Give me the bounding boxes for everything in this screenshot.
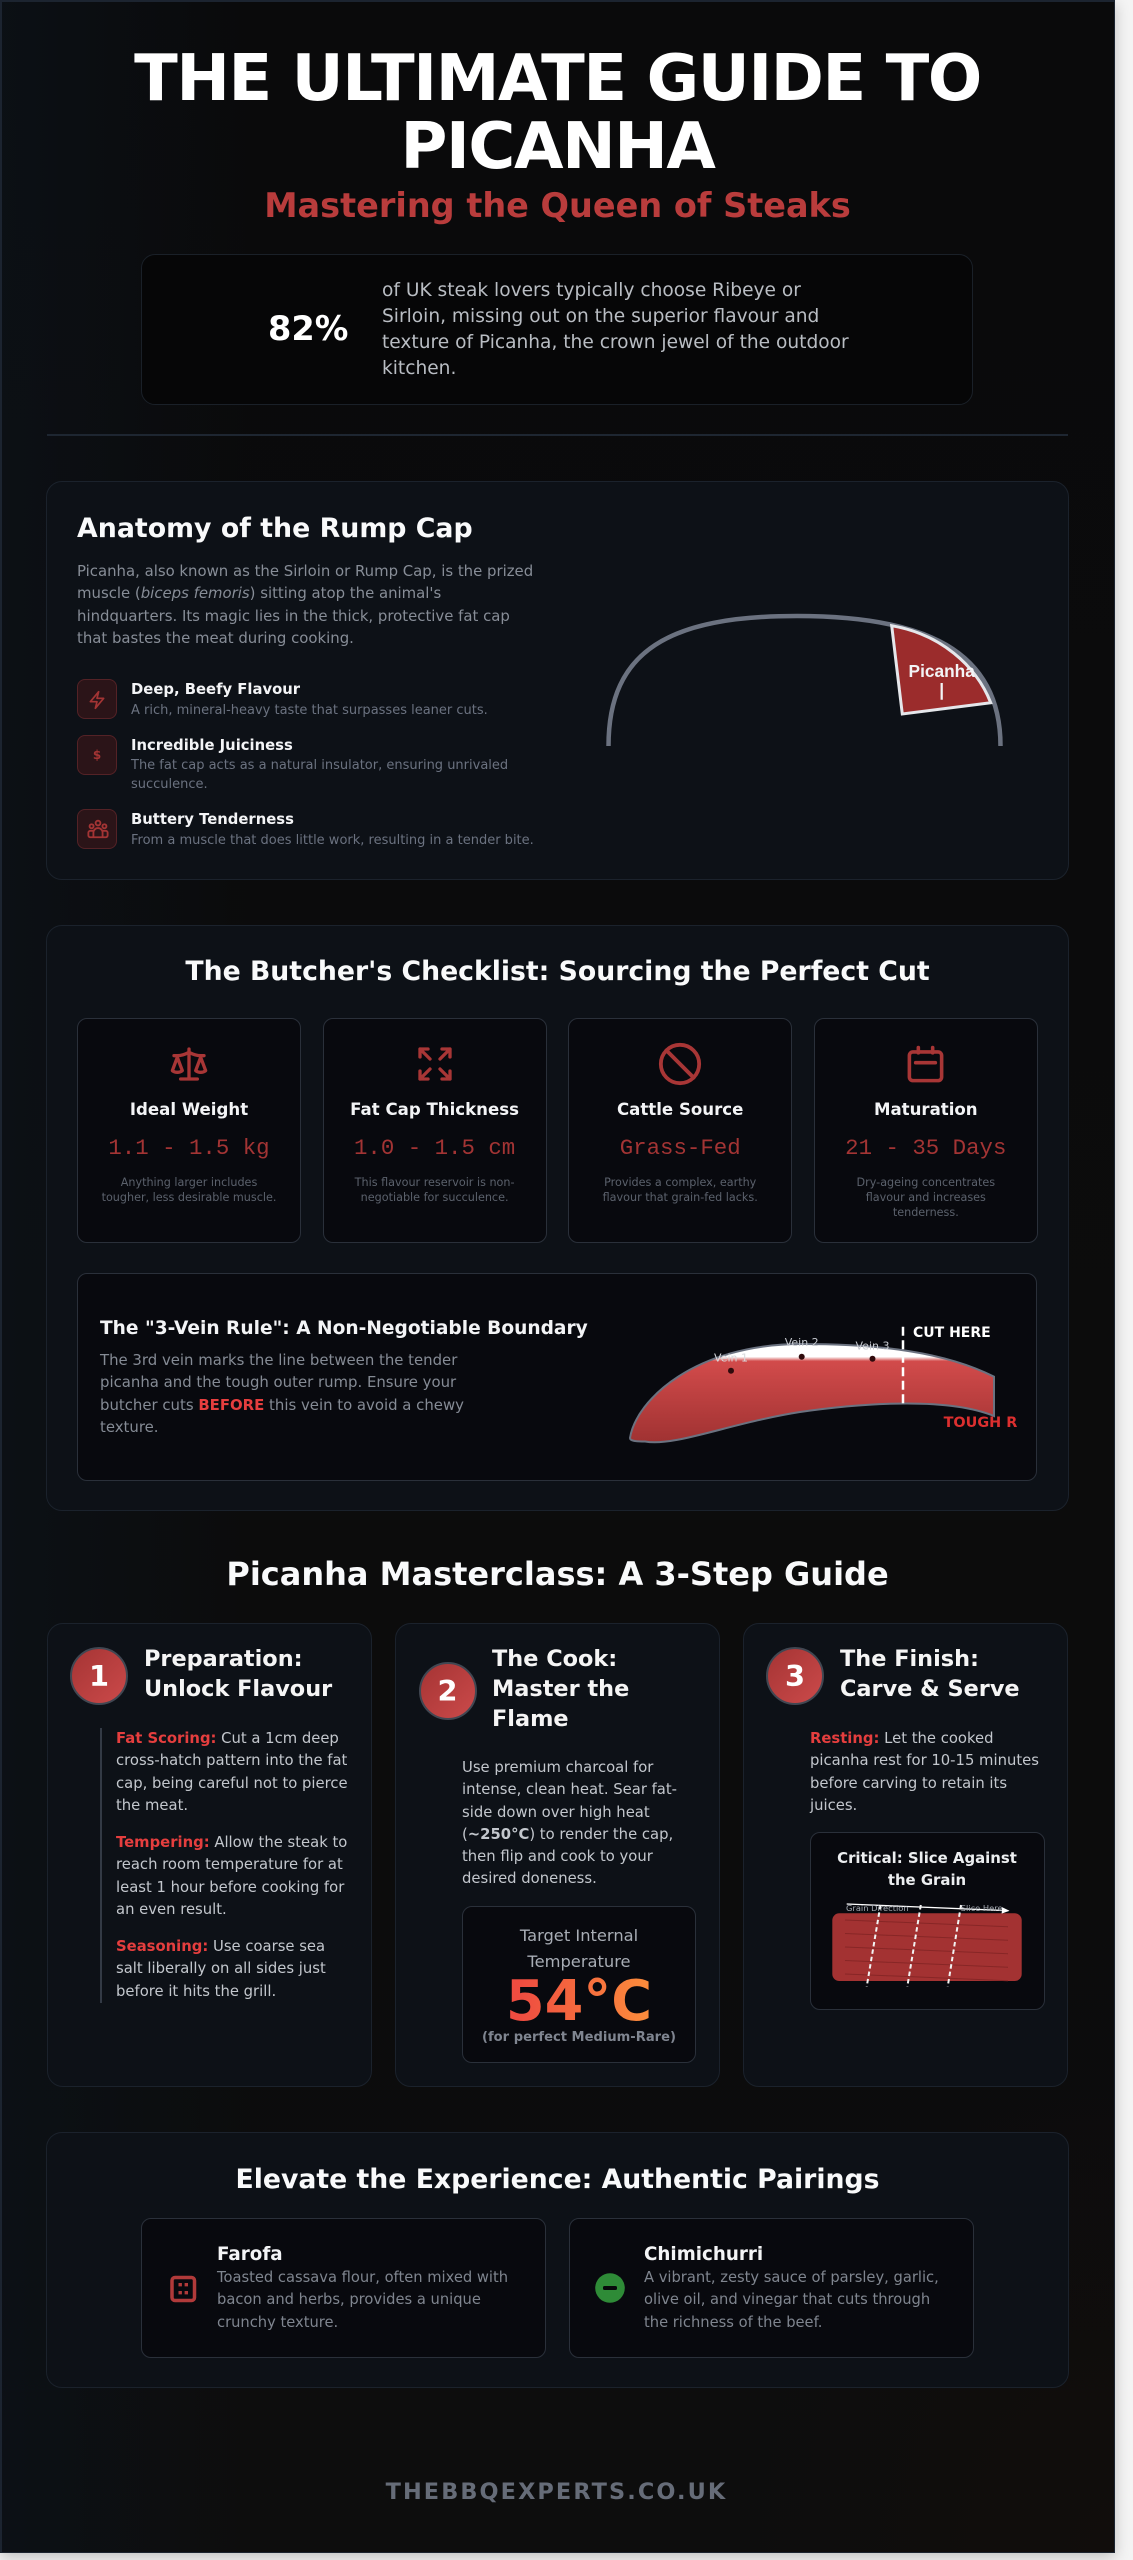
card note: tenderness. — [893, 1206, 959, 1219]
step 3 instructions — [810, 1730, 1039, 1814]
card: chimichurri — [569, 2218, 974, 2358]
panel: step 3 — [742, 1623, 1068, 2087]
tough rump label: TOUGH R — [944, 1415, 1017, 1431]
cut line — [902, 1327, 904, 1407]
feature: flavour title: Deep, Beefy Flavour — [131, 681, 300, 698]
card: ideal weight — [77, 1018, 301, 1243]
step 1 instructions — [100, 1728, 360, 2003]
icon: farofa — [170, 2276, 196, 2302]
card note: flavour and increases — [866, 1191, 986, 1204]
feature: juiciness description: The fat cap acts as a natural insulator, ensuring unrivaled — [131, 758, 508, 773]
seasoning — [116, 1938, 326, 2000]
statistic description: Sirloin, missing out on the superior flavour and — [382, 306, 819, 327]
tempering — [116, 1834, 347, 1918]
step 2 title: Flame — [492, 1706, 569, 1732]
feature: tenderness title: Buttery Tenderness — [131, 811, 294, 828]
title: THE ULTIMATE GUIDE TO — [134, 42, 981, 116]
heading: pairings: Elevate the Experience: Authentic Pairings — [236, 2164, 879, 2195]
panel: butcher's checklist — [46, 925, 1069, 1511]
icon: scales — [170, 1047, 208, 1081]
diagram: rump cap anatomy — [606, 614, 1003, 746]
temperature value: 54°C — [506, 1969, 652, 2034]
anatomy description: Picanha, also known as the Sirloin or Rump Cap, is the prized — [77, 562, 533, 580]
subtitle: Mastering the Queen of Steaks — [264, 186, 851, 225]
tempering: Tempering: Allow the steak to — [116, 1834, 347, 1851]
callout title — [837, 1849, 1017, 1889]
vein 1: Vein 1 — [714, 1352, 748, 1364]
cut label: CUT HERE — [913, 1325, 991, 1341]
temperature label: Temperature — [527, 1952, 631, 1971]
farofa title: Farofa — [217, 2244, 283, 2265]
icon: calendar — [908, 1046, 944, 1082]
panel: step 1 — [46, 1623, 372, 2087]
chimichurri description: the richness of the beef. — [644, 2314, 822, 2331]
temperature value — [463, 1967, 695, 2037]
vein 3: Vein 3 — [856, 1340, 889, 1352]
step 3 instructions: picanha rest for 10-15 minutes — [810, 1752, 1039, 1769]
grain arrow — [847, 1904, 1008, 1911]
heading: 3-vein rule: The "3-Vein Rule": A Non-Negotiable Boundary — [100, 1318, 588, 1339]
title — [134, 42, 981, 184]
card title: Maturation — [874, 1100, 978, 1119]
step 2 instructions: (~250°C) to render the cap, — [462, 1826, 673, 1843]
card note — [602, 1176, 758, 1204]
card title: Cattle Source — [617, 1100, 743, 1119]
slice label: Slice Here — [961, 1903, 1003, 1913]
farofa description: Toasted cassava flour, often mixed with — [217, 2269, 508, 2286]
card note: Anything larger includes — [121, 1176, 257, 1189]
step 3 instructions: before carving to retain its — [810, 1775, 1007, 1792]
icon: tenderness — [77, 808, 117, 848]
chimichurri title: Chimichurri — [644, 2244, 763, 2265]
step 2 title: Master the — [492, 1676, 629, 1702]
vein 3 — [856, 1340, 889, 1362]
cow rump outline — [608, 616, 1000, 746]
statistic description: of UK steak lovers typically choose Ribeye or — [382, 280, 801, 301]
card note: Dry-ageing concentrates — [857, 1176, 995, 1189]
vein 2 — [785, 1336, 819, 1360]
step 3 number: 3 — [785, 1659, 805, 1693]
fat scoring: the meat. — [116, 1797, 188, 1814]
anatomy description: hindquarters. Its magic lies in the thick, protective fat cap — [77, 607, 510, 625]
3-vein description: The 3rd vein marks the line between the tender — [100, 1351, 457, 1369]
card value: 1.1 - 1.5 kg — [108, 1135, 270, 1161]
diagram: veins on the picanha — [629, 1325, 1017, 1444]
statistic value: 82% — [268, 309, 348, 348]
tempering: an even result. — [116, 1901, 227, 1918]
step 2 instructions: intense, clean heat. Sear fat- — [462, 1781, 677, 1798]
icon: expand arrows — [418, 1047, 452, 1081]
callout: slice against the grain — [810, 1832, 1044, 2010]
panel: pairings — [46, 2132, 1069, 2388]
grain label: Grain Direction — [846, 1903, 909, 1913]
callout title: Critical: Slice Against — [837, 1849, 1017, 1867]
vein 2: Vein 2 — [785, 1336, 819, 1349]
farofa description: crunchy texture. — [217, 2314, 338, 2331]
card note: flavour that grain-fed lacks. — [603, 1191, 758, 1204]
title: PICANHA — [400, 110, 715, 184]
feature: juiciness description — [130, 758, 508, 792]
step 3 number — [766, 1647, 824, 1705]
feature: juiciness title: Incredible Juiciness — [131, 737, 293, 754]
card: maturation — [814, 1018, 1038, 1243]
tempering: least 1 hour before cooking for — [116, 1879, 344, 1896]
card note: Provides a complex, earthy — [604, 1176, 756, 1189]
step 2 number: 2 — [437, 1674, 458, 1708]
step 3 instructions: Resting: Let the cooked — [810, 1730, 994, 1747]
seasoning: salt liberally on all sides just — [116, 1960, 326, 1977]
anatomy description: muscle (biceps femoris) sitting atop the animal's — [77, 584, 441, 602]
card note: This flavour reservoir is non- — [355, 1176, 515, 1189]
card: fat cap thickness — [323, 1018, 547, 1243]
card title: Ideal Weight — [130, 1100, 248, 1119]
step 2 instructions — [462, 1759, 677, 1887]
step 2 title — [492, 1646, 629, 1732]
slice lines — [867, 1905, 961, 1987]
card: farofa — [141, 2218, 546, 2358]
farofa description — [216, 2269, 508, 2331]
step 1 title — [144, 1646, 332, 1702]
heading: anatomy: Anatomy of the Rump Cap — [77, 513, 473, 544]
step 2 instructions: desired doneness. — [462, 1870, 597, 1887]
icon: chimichurri — [595, 2273, 625, 2303]
icon: ban — [658, 1042, 702, 1086]
step 2 instructions: Use premium charcoal for — [462, 1759, 653, 1776]
temperature note: (for perfect Medium-Rare) — [482, 2030, 676, 2045]
feature: flavour description: A rich, mineral-heavy taste that surpasses leaner cuts. — [131, 703, 488, 718]
icon: flavour bolt — [77, 679, 117, 719]
feature: juiciness description: succulence. — [131, 777, 208, 792]
panel: anatomy of the rump cap — [46, 481, 1069, 880]
fat scoring: cross-hatch pattern into the fat — [116, 1752, 347, 1769]
anatomy description — [77, 562, 533, 647]
statistic description: kitchen. — [382, 358, 456, 379]
statistic description: texture of Picanha, the crown jewel of the outdoor — [382, 332, 849, 353]
wedge marker: | — [939, 680, 944, 700]
3-vein description: texture. — [100, 1418, 159, 1436]
anatomy description: that bastes the meat during cooking. — [77, 629, 354, 647]
step 1 number: 1 — [89, 1659, 109, 1693]
statistic description — [382, 280, 849, 379]
temperature label — [520, 1926, 638, 1971]
vein 1 — [714, 1352, 748, 1374]
step 2 instructions: then flip and cook to your — [462, 1848, 653, 1865]
feature: tenderness description: From a muscle that does little work, resulting in a tender bite. — [131, 833, 534, 848]
callout: target temperature — [462, 1906, 696, 2063]
card note: negotiable for succulence. — [361, 1191, 509, 1204]
callout title: the Grain — [888, 1871, 966, 1889]
seasoning: before it hits the grill. — [116, 1983, 276, 2000]
steak shape — [630, 1344, 994, 1442]
fat scoring: cap, being careful not to pierce — [116, 1775, 348, 1792]
fat scoring — [116, 1730, 348, 1814]
fat scoring: Fat Scoring: Cut a 1cm deep — [116, 1730, 339, 1747]
temperature label: Target Internal — [520, 1926, 638, 1945]
card note — [102, 1176, 276, 1204]
chimichurri description: A vibrant, zesty sauce of parsley, garlic, — [644, 2269, 939, 2286]
3-vein description: picanha and the tough outer rump. Ensure your — [100, 1373, 456, 1391]
step 3 title — [840, 1646, 1020, 1702]
card value: 21 - 35 Days — [845, 1135, 1006, 1161]
heading: masterclass: Picanha Masterclass: A 3-Step Guide — [226, 1555, 889, 1593]
farofa description: bacon and herbs, provides a unique — [217, 2291, 481, 2308]
step 1 title: Unlock Flavour — [144, 1676, 332, 1702]
step 3 instructions: juices. — [810, 1797, 857, 1814]
card value: 1.0 - 1.5 cm — [354, 1135, 515, 1161]
chimichurri description: olive oil, and vinegar that cuts through — [644, 2291, 930, 2308]
footer: THEBBQEXPERTS.CO.UK — [386, 2479, 727, 2505]
icon: juiciness — [77, 735, 117, 775]
seasoning: Seasoning: Use coarse sea — [116, 1938, 325, 1955]
panel: step 2 — [395, 1623, 720, 2087]
step 2 instructions: side down over high heat — [462, 1804, 650, 1821]
card value: Grass-Fed — [620, 1135, 741, 1161]
panel: 82% statistic — [141, 254, 973, 405]
card note: tougher, less desirable muscle. — [102, 1191, 276, 1204]
meat block — [832, 1913, 1022, 1981]
grain lines — [845, 1920, 1008, 1981]
3-vein description — [100, 1351, 464, 1436]
heading: checklist: The Butcher's Checklist: Sourcing the Perfect Cut — [185, 956, 930, 987]
step 1 title: Preparation: — [144, 1646, 303, 1672]
tempering: reach room temperature for at — [116, 1856, 343, 1873]
icon: juiciness: $ — [93, 748, 101, 762]
step 2 title: The Cook: — [492, 1646, 617, 1672]
step 1 number — [70, 1647, 128, 1705]
chimichurri description — [644, 2269, 939, 2331]
step 3 title: Carve & Serve — [840, 1676, 1020, 1702]
card note — [354, 1176, 515, 1204]
3-vein description: butcher cuts BEFORE this vein to avoid a chewy — [100, 1396, 464, 1414]
card title: Fat Cap Thickness — [350, 1100, 519, 1119]
panel: 3-vein rule — [77, 1273, 1037, 1481]
diagram: grain direction — [832, 1903, 1022, 1987]
picanha wedge — [892, 626, 991, 714]
step 2 number — [418, 1662, 476, 1720]
step 3 title: The Finish: — [840, 1646, 979, 1672]
card note — [857, 1176, 995, 1219]
wedge label: Picanha — [909, 661, 975, 681]
card: cattle source — [568, 1018, 792, 1243]
